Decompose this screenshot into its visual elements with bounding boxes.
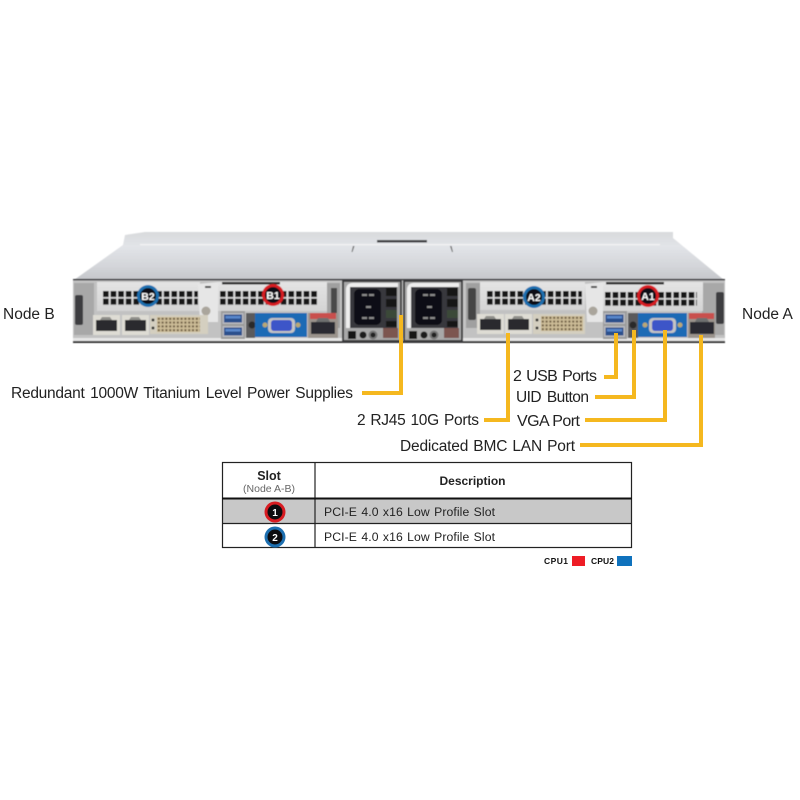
CPU legend — [544, 556, 632, 566]
label: RJ45 ports: 2 RJ45 10G Ports — [357, 412, 479, 429]
slot badge 2 — [264, 526, 286, 548]
header: Slot: Slot — [257, 469, 282, 483]
USB ports — [221, 311, 245, 339]
slot badge 1 — [264, 502, 286, 522]
BMC LAN port — [308, 313, 338, 338]
badge B2 — [137, 285, 159, 307]
power supply 1 — [342, 280, 402, 342]
label: Node A: Node A — [742, 306, 794, 323]
riser B1 — [218, 282, 327, 311]
label: VGA port: VGA Port — [517, 413, 581, 430]
header: Node A-B: (Node A-B) — [243, 483, 295, 495]
row 2 description: PCI-E 4.0 x16 Low Profile Slot — [324, 530, 496, 544]
riser A2 — [480, 282, 585, 310]
badge A2 — [523, 286, 545, 308]
server rear face — [73, 279, 725, 343]
slot table — [222, 462, 632, 548]
riser B2 — [97, 282, 200, 311]
node B — [73, 281, 342, 339]
header: Description: Description — [439, 474, 506, 488]
label: UID button: UID Button — [516, 389, 589, 406]
latch — [585, 282, 603, 322]
DVI port — [533, 314, 585, 334]
label: Node B: Node B — [3, 306, 55, 323]
badge B1: B1 — [266, 290, 280, 302]
row 1 description: PCI-E 4.0 x16 Low Profile Slot — [324, 505, 496, 519]
VGA port — [255, 313, 307, 337]
riser A1 — [603, 282, 703, 311]
CPU legend: CPU2 — [591, 556, 614, 566]
VGA port — [638, 313, 687, 337]
label: BMC LAN port: Dedicated BMC LAN Port — [400, 438, 576, 455]
callout line: BMC LAN port — [580, 335, 701, 445]
CPU legend: CPU1 — [544, 556, 568, 566]
callout line: RJ45 ports — [484, 333, 508, 420]
callout line: power supplies — [362, 315, 401, 393]
RJ45 ports — [477, 314, 532, 334]
badge A2: A2 — [527, 292, 541, 304]
badge A1: A1 — [641, 291, 655, 303]
callout line: USB ports — [604, 333, 616, 377]
BMC LAN port — [688, 313, 715, 338]
slot badge 2: 2 — [272, 533, 278, 544]
badge B1 — [262, 284, 284, 306]
UID button — [628, 313, 638, 338]
badge B2: B2 — [141, 291, 155, 303]
callout line: VGA port — [585, 330, 665, 420]
latch — [198, 282, 218, 322]
label: power supplies: Redundant 1000W Titanium Level Power Supplies — [11, 385, 353, 402]
label: USB ports: 2 USB Ports — [513, 368, 597, 385]
node A — [465, 281, 725, 339]
UID button — [246, 313, 256, 338]
slot badge 1: 1 — [272, 508, 278, 519]
chassis top panel — [74, 232, 724, 280]
callout line: UID button — [595, 330, 634, 397]
RJ45 ports — [93, 315, 149, 335]
badge A1 — [637, 285, 659, 307]
DVI port — [150, 315, 208, 334]
USB ports — [603, 311, 627, 339]
power supply 2 — [403, 280, 463, 342]
